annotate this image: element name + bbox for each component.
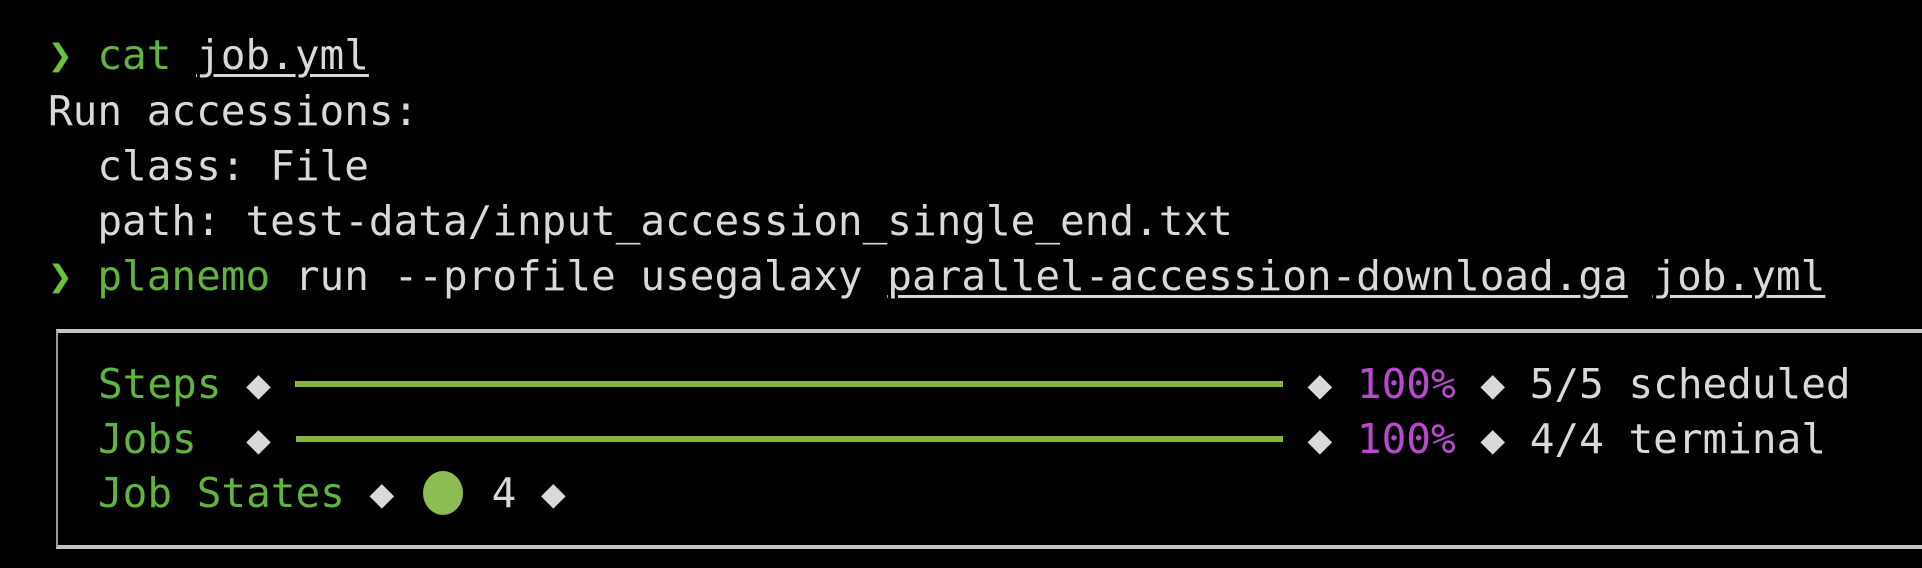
- jobs row: Jobs ◆ ◆ 100% ◆ 4/4 terminal: [98, 415, 1826, 463]
- command: cat job.yml: ❯ cat job.yml: [48, 31, 369, 79]
- steps row: Steps ◆ ◆ 100% ◆ 5/5 scheduled: [98, 360, 1851, 408]
- job states row: Job States ◆ 4 ◆: [98, 469, 566, 517]
- command: planemo run: ❯ planemo run --profile usegalaxy parallel-accession-download.ga job.yml: [48, 252, 1825, 300]
- progress panel: [56, 329, 1922, 549]
- yaml output: Run accessions: class: File path: test-data/input_accession_single_end.txt: [48, 87, 1233, 245]
